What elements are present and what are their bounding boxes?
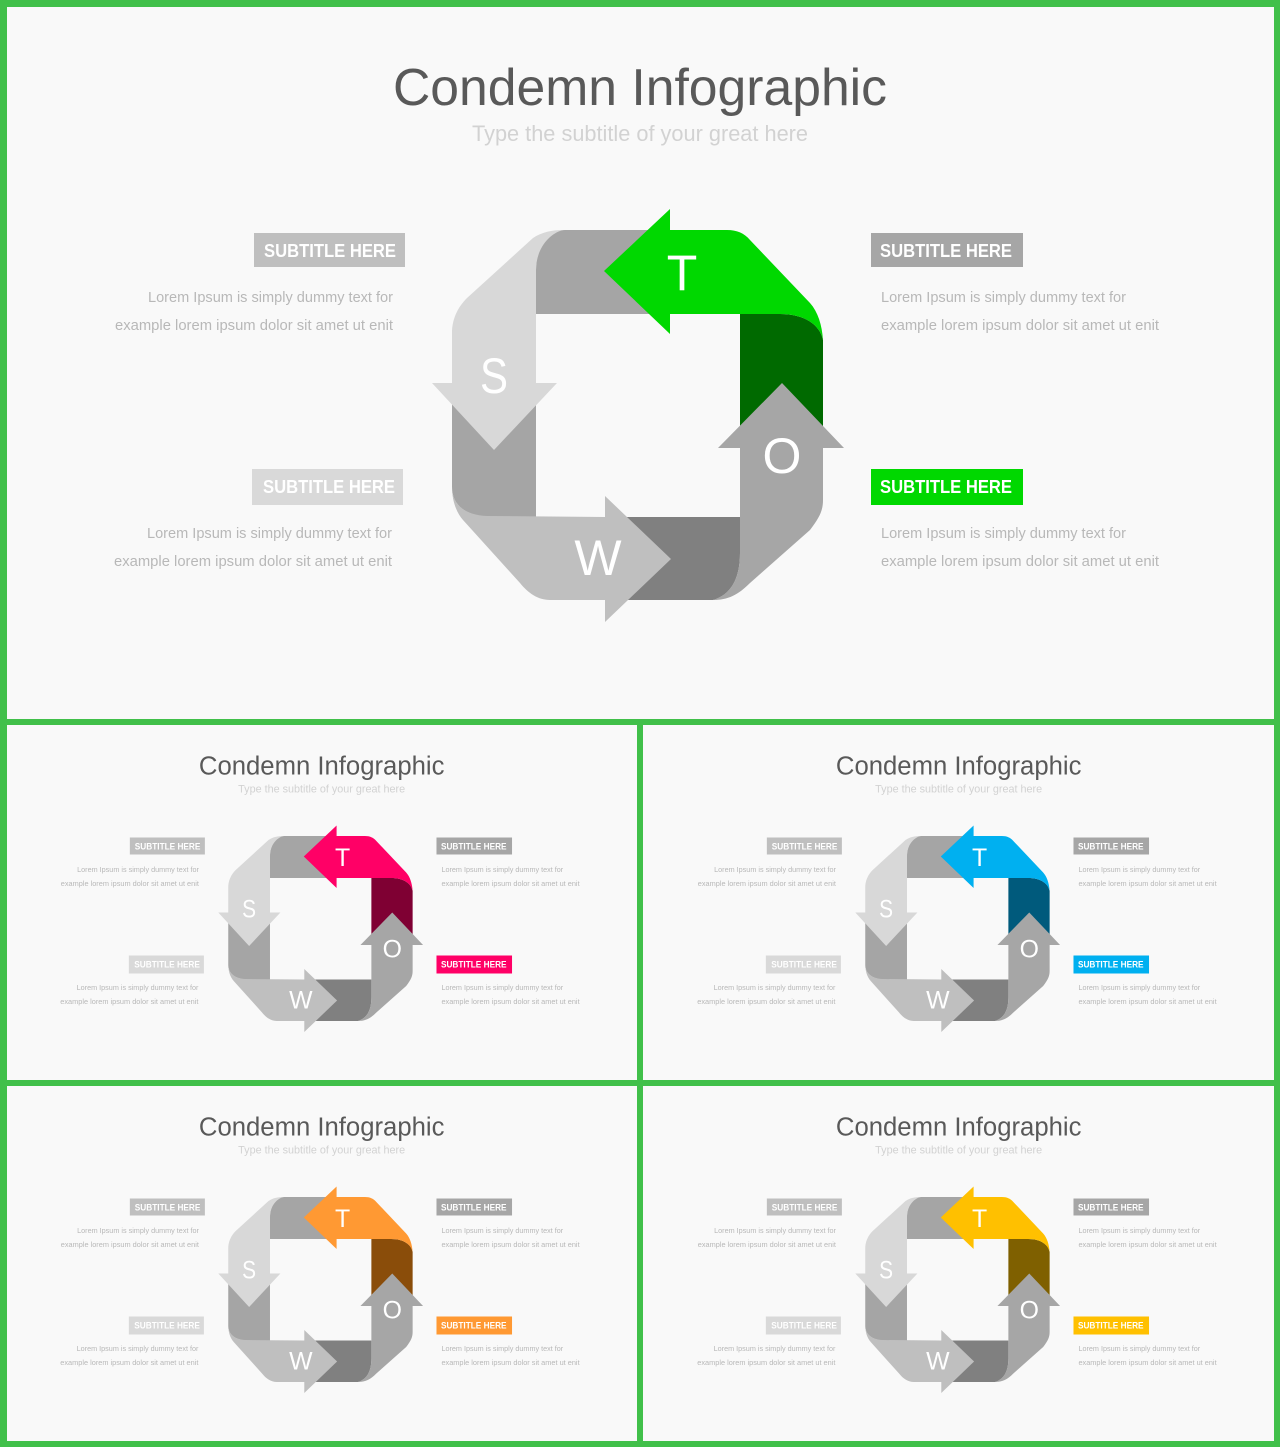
panel background: orange slide — [7, 1086, 637, 1441]
callout: bottom right: Lorem Ipsum is simply dummy text for — [441, 1344, 564, 1353]
arrow S — [218, 1197, 283, 1307]
callout: top left — [61, 1198, 205, 1249]
callout: top right: example lorem ipsum dolor sit amet ut enit — [881, 317, 1160, 334]
callout: top right: SUBTITLE HERE — [1078, 841, 1144, 852]
arrow S — [432, 230, 563, 450]
callout: top right — [436, 1198, 581, 1249]
panel: yellow slide — [697, 1113, 1218, 1393]
callout: bottom left — [60, 956, 204, 1006]
letter O: O — [1020, 1296, 1039, 1325]
callout: bottom left: example lorem ipsum dolor sit amet ut enit — [697, 997, 836, 1006]
letter T: T — [335, 1205, 350, 1233]
title: Condemn Infographic — [836, 752, 1081, 781]
callout: top right: SUBTITLE HERE — [1078, 1202, 1144, 1213]
subtitle: Type the subtitle of your great here — [238, 783, 405, 796]
callout: bottom left: SUBTITLE HERE — [134, 1320, 200, 1331]
callout: bottom left: example lorem ipsum dolor sit amet ut enit — [60, 997, 199, 1006]
arrow W — [228, 964, 337, 1032]
letter T: T — [972, 844, 987, 872]
callout: top left — [698, 1198, 842, 1249]
letter W: W — [926, 986, 950, 1015]
callout: bottom right — [1073, 1316, 1218, 1367]
callout: top right — [871, 233, 1160, 334]
SWOT cycle diagram — [855, 826, 1060, 1032]
letter O: O — [1020, 935, 1039, 964]
callout: top left: example lorem ipsum dolor sit amet ut enit — [698, 879, 837, 888]
letter S: S — [480, 348, 508, 404]
arrow O — [358, 1274, 423, 1382]
callout: top left — [61, 838, 205, 888]
callout: bottom left: Lorem Ipsum is simply dummy text for — [147, 525, 392, 542]
letter O: O — [383, 1296, 402, 1325]
callout: bottom right: SUBTITLE HERE — [441, 1320, 507, 1331]
callout: bottom right: Lorem Ipsum is simply dummy text for — [1078, 1344, 1201, 1353]
callout: bottom left — [697, 1316, 841, 1367]
letter S: S — [242, 1256, 256, 1285]
panel background: blue slide — [643, 725, 1274, 1080]
letter W: W — [289, 1347, 313, 1376]
title: Condemn Infographic — [199, 1113, 444, 1142]
callout: bottom right — [436, 956, 581, 1006]
SWOT cycle diagram — [218, 1186, 423, 1393]
callout: top right — [436, 838, 581, 888]
panel background: yellow slide — [643, 1086, 1274, 1441]
callout: top right: Lorem Ipsum is simply dummy text for — [441, 1226, 564, 1235]
callout: top right: Lorem Ipsum is simply dummy text for — [1078, 1226, 1201, 1235]
panel: main green slide — [114, 59, 1160, 622]
letter W: W — [926, 1347, 950, 1376]
callout: top right: example lorem ipsum dolor sit amet ut enit — [441, 879, 581, 888]
callout: top right — [1073, 1198, 1218, 1249]
callout: top left: SUBTITLE HERE — [135, 841, 200, 852]
letter O: O — [763, 428, 801, 484]
arrow O — [358, 912, 423, 1021]
callout: bottom right: SUBTITLE HERE — [441, 959, 507, 970]
callout: top left: example lorem ipsum dolor sit amet ut enit — [61, 1240, 200, 1249]
callout: top left: SUBTITLE HERE — [264, 241, 396, 261]
callout: top right: example lorem ipsum dolor sit amet ut enit — [1078, 879, 1218, 888]
callout: top right — [1073, 838, 1218, 888]
arrow T — [941, 826, 1050, 891]
callout: bottom left — [60, 1316, 204, 1367]
callout: top right: example lorem ipsum dolor sit amet ut enit — [441, 1240, 581, 1249]
callout: top left: SUBTITLE HERE — [772, 841, 837, 852]
arrow T — [304, 826, 413, 891]
letter S: S — [879, 895, 893, 924]
callout: top right: Lorem Ipsum is simply dummy text for — [441, 865, 564, 874]
callout: bottom right: example lorem ipsum dolor sit amet ut enit — [441, 1358, 581, 1367]
subtitle: Type the subtitle of your great here — [875, 783, 1042, 796]
panel: pink slide — [60, 752, 581, 1032]
callout: bottom left: SUBTITLE HERE — [134, 959, 200, 970]
subtitle: Type the subtitle of your great here — [238, 1144, 405, 1157]
callout: top left — [698, 838, 842, 888]
arrow S — [855, 1197, 920, 1307]
callout: top right: SUBTITLE HERE — [880, 241, 1012, 261]
callout: top left: Lorem Ipsum is simply dummy text for — [77, 865, 199, 874]
subtitle: Type the subtitle of your great here — [472, 121, 808, 146]
callout: bottom right: example lorem ipsum dolor sit amet ut enit — [1078, 997, 1218, 1006]
callout: bottom right — [871, 469, 1160, 570]
arrow T — [604, 209, 823, 340]
callout: top right: example lorem ipsum dolor sit amet ut enit — [1078, 1240, 1218, 1249]
callout: top left — [115, 233, 405, 334]
callout: bottom left: SUBTITLE HERE — [771, 959, 837, 970]
SWOT cycle diagram — [432, 209, 844, 622]
arrow S — [855, 836, 920, 946]
callout: top left: example lorem ipsum dolor sit amet ut enit — [115, 317, 394, 334]
callout: bottom left: example lorem ipsum dolor sit amet ut enit — [697, 1358, 836, 1367]
title: Condemn Infographic — [836, 1113, 1081, 1142]
callout: top right: Lorem Ipsum is simply dummy text for — [881, 289, 1126, 306]
letter O: O — [383, 935, 402, 964]
callout: bottom left: SUBTITLE HERE — [263, 477, 395, 497]
callout: bottom right — [1073, 956, 1218, 1006]
letter T: T — [667, 245, 697, 301]
callout: bottom right: example lorem ipsum dolor sit amet ut enit — [1078, 1358, 1218, 1367]
callout: bottom left — [697, 956, 841, 1006]
callout: bottom left: Lorem Ipsum is simply dummy text for — [714, 1344, 836, 1353]
panel: orange slide — [60, 1113, 581, 1393]
letter T: T — [972, 1205, 987, 1233]
arrow W — [865, 1326, 974, 1393]
callout: bottom left: Lorem Ipsum is simply dummy text for — [77, 983, 199, 992]
callout: bottom left: SUBTITLE HERE — [771, 1320, 837, 1331]
callout: top left: example lorem ipsum dolor sit amet ut enit — [698, 1240, 837, 1249]
callout: bottom right: example lorem ipsum dolor sit amet ut enit — [881, 553, 1160, 570]
title: Condemn Infographic — [393, 59, 887, 117]
callout: bottom left: example lorem ipsum dolor sit amet ut enit — [60, 1358, 199, 1367]
title: Condemn Infographic — [199, 752, 444, 781]
letter W: W — [289, 986, 313, 1015]
callout: bottom right: Lorem Ipsum is simply dummy text for — [881, 525, 1126, 542]
SWOT cycle diagram — [855, 1186, 1060, 1393]
callout: top left: Lorem Ipsum is simply dummy text for — [77, 1226, 199, 1235]
callout: top left: Lorem Ipsum is simply dummy text for — [714, 865, 836, 874]
arrow T — [941, 1186, 1050, 1252]
arrow O — [995, 1274, 1060, 1382]
arrow W — [452, 487, 671, 622]
arrow T — [304, 1186, 413, 1252]
callout: top left: SUBTITLE HERE — [772, 1202, 837, 1213]
callout: bottom right: SUBTITLE HERE — [1078, 1320, 1144, 1331]
callout: bottom right: example lorem ipsum dolor sit amet ut enit — [441, 997, 581, 1006]
callout: bottom right: Lorem Ipsum is simply dummy text for — [441, 983, 564, 992]
callout: top left: Lorem Ipsum is simply dummy text for — [714, 1226, 836, 1235]
callout: top left: example lorem ipsum dolor sit amet ut enit — [61, 879, 200, 888]
letter T: T — [335, 844, 350, 872]
callout: bottom left: Lorem Ipsum is simply dummy text for — [714, 983, 836, 992]
letter W: W — [574, 530, 622, 586]
SWOT cycle diagram — [218, 826, 423, 1032]
callout: top left: SUBTITLE HERE — [135, 1202, 200, 1213]
callout: bottom left: Lorem Ipsum is simply dummy text for — [77, 1344, 199, 1353]
arrow W — [865, 964, 974, 1032]
letter S: S — [879, 1256, 893, 1285]
callout: bottom right: SUBTITLE HERE — [1078, 959, 1144, 970]
callout: bottom right — [436, 1316, 581, 1367]
panel: blue slide — [697, 752, 1218, 1032]
callout: bottom left — [114, 469, 403, 570]
callout: bottom right: Lorem Ipsum is simply dummy text for — [1078, 983, 1201, 992]
panel background: pink slide — [7, 725, 637, 1080]
subtitle: Type the subtitle of your great here — [875, 1144, 1042, 1157]
callout: top right: SUBTITLE HERE — [441, 841, 507, 852]
arrow O — [995, 912, 1060, 1021]
callout: top right: SUBTITLE HERE — [441, 1202, 507, 1213]
letter S: S — [242, 895, 256, 924]
callout: bottom right: SUBTITLE HERE — [880, 477, 1012, 497]
callout: bottom left: example lorem ipsum dolor sit amet ut enit — [114, 553, 393, 570]
callout: top right: Lorem Ipsum is simply dummy text for — [1078, 865, 1201, 874]
arrow S — [218, 836, 283, 946]
arrow W — [228, 1326, 337, 1393]
arrow O — [713, 383, 844, 600]
panel background: main slide — [7, 7, 1274, 719]
callout: top left: Lorem Ipsum is simply dummy text for — [148, 289, 393, 306]
